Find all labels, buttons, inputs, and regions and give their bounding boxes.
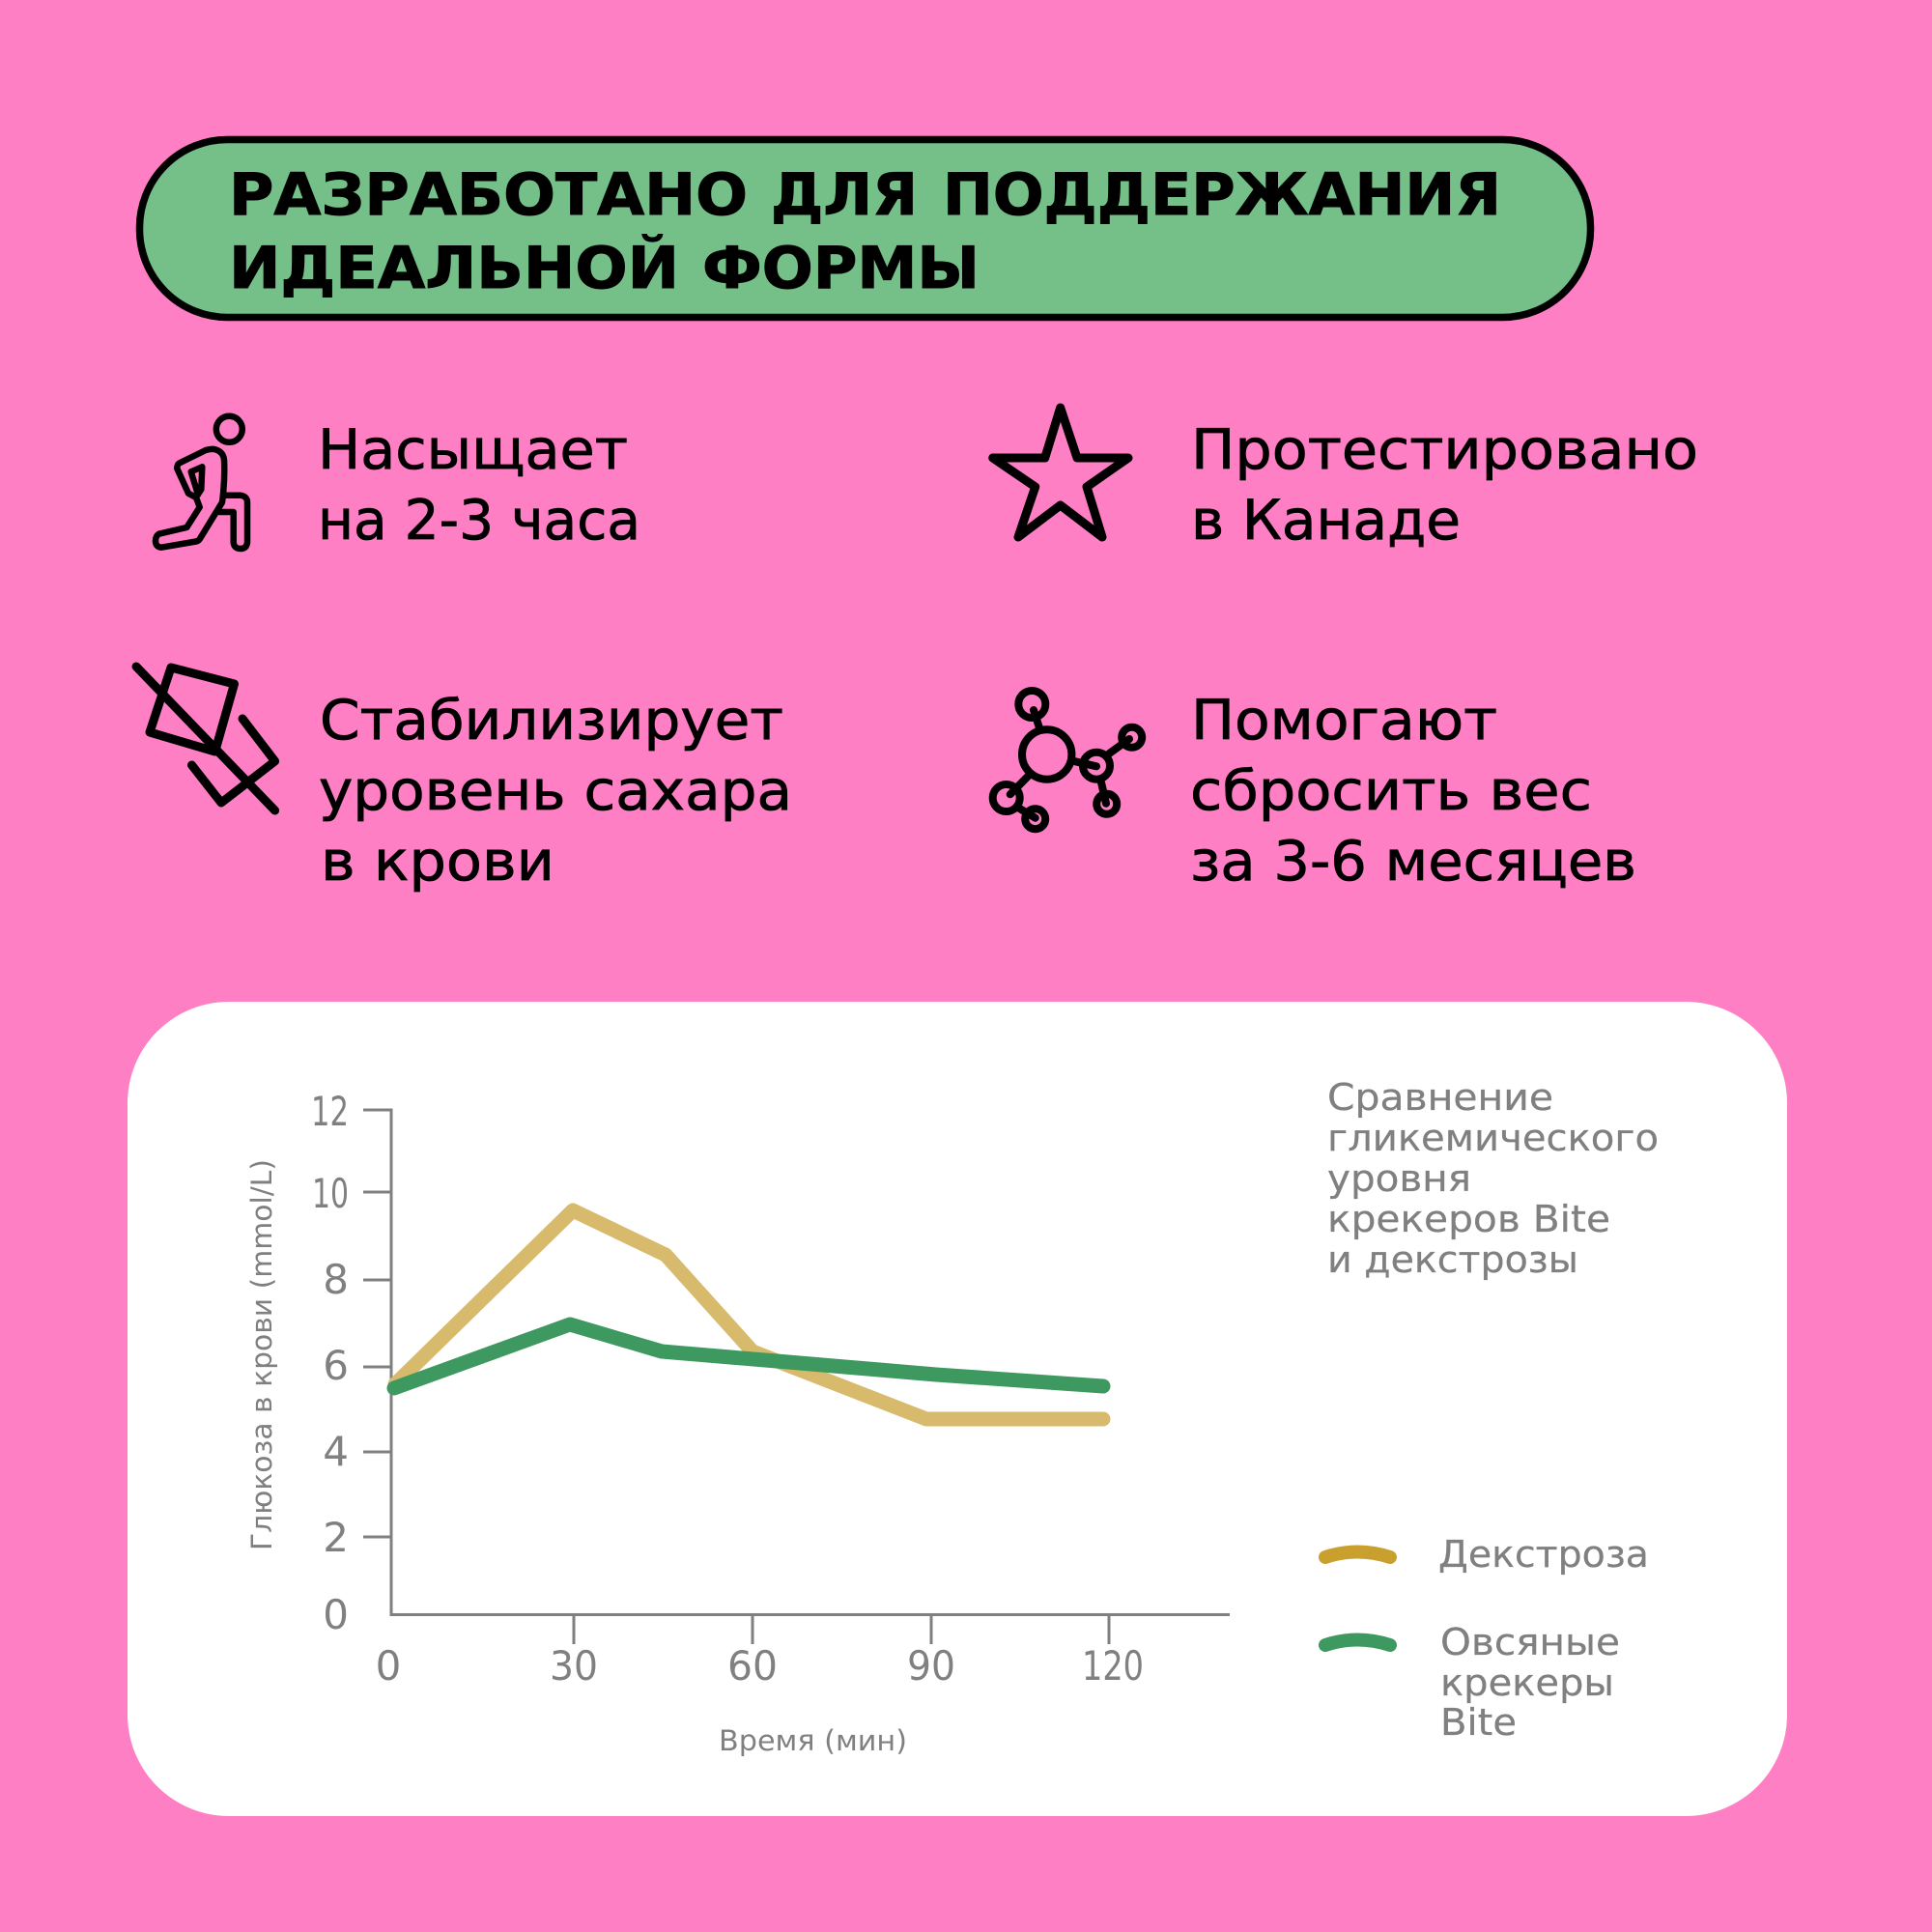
title pill: ДЛЯ <box>771 161 918 229</box>
y-axis numbers: 12 <box>311 1088 349 1135</box>
text: stabilizes sugar: уровень сахара <box>319 759 792 823</box>
text: satiety: на 2-3 часа <box>318 489 640 553</box>
line: dextrose <box>395 1210 1103 1419</box>
chart axes <box>363 1110 1230 1644</box>
x-axis numbers: 90 <box>907 1642 955 1690</box>
text: helps lose weight <box>1190 689 1636 894</box>
chart description: и декстрозы <box>1327 1238 1578 1281</box>
y-axis numbers: 8 <box>323 1256 349 1303</box>
line chart <box>245 1088 1230 1757</box>
legend: dextrose: Декстроза <box>1438 1533 1649 1576</box>
text: stabilizes sugar: в крови <box>321 830 554 894</box>
line: oat crackers <box>394 1324 1103 1388</box>
title pill <box>139 139 1590 317</box>
y-axis numbers: 4 <box>323 1428 349 1475</box>
icon: lunging person <box>156 416 247 549</box>
text: helps lose weight: Помогают <box>1191 689 1497 753</box>
icon: crossed-out cracker <box>136 667 275 810</box>
y-axis numbers <box>311 1088 349 1638</box>
text: satiety: Насыщает <box>318 418 628 482</box>
y-axis numbers: 6 <box>323 1342 349 1389</box>
text: tested <box>1191 418 1698 553</box>
chart description: гликемического <box>1327 1117 1659 1159</box>
icon: star <box>993 408 1128 537</box>
text: stabilizes sugar: Стабилизирует <box>320 689 783 753</box>
x-axis numbers: 60 <box>727 1642 778 1690</box>
legend: oat crackers: Bite <box>1440 1701 1517 1744</box>
chart description: крекеров Bite <box>1327 1198 1610 1240</box>
x-axis numbers: 120 <box>1082 1642 1144 1690</box>
text: helps lose weight: сбросить вес <box>1190 759 1592 823</box>
y-axis numbers: 2 <box>323 1514 349 1561</box>
y-axis numbers: 0 <box>323 1591 349 1638</box>
legend: oat crackers <box>1325 1621 1620 1744</box>
text: stabilizes sugar <box>319 689 792 894</box>
chart description: уровня <box>1327 1157 1471 1200</box>
title pill: ИДЕАЛЬНОЙ <box>229 233 679 302</box>
icon: molecule <box>993 691 1142 829</box>
text: helps lose weight: за 3-6 месяцев <box>1190 830 1636 894</box>
legend: oat crackers: крекеры <box>1440 1662 1614 1704</box>
chart description: Сравнение <box>1327 1076 1553 1119</box>
legend: dextrose <box>1325 1533 1649 1576</box>
text: satiety <box>318 418 640 553</box>
y-axis title: Глюкоза в крови (mmol/L) <box>245 1159 278 1550</box>
x-axis numbers: 30 <box>550 1642 598 1690</box>
legend: oat crackers: Овсяные <box>1440 1621 1620 1663</box>
x-axis numbers <box>376 1642 1144 1690</box>
title pill: ПОДДЕРЖАНИЯ <box>943 161 1501 229</box>
panel: chart card <box>128 1002 1787 1816</box>
text: tested: Протестировано <box>1191 418 1698 482</box>
title pill: ФОРМЫ <box>702 235 980 302</box>
text: tested: в Канаде <box>1191 489 1461 553</box>
title pill: РАЗРАБОТАНО <box>229 161 748 229</box>
chart description <box>1327 1076 1659 1281</box>
x-axis title: Время (мин) <box>719 1724 907 1757</box>
y-axis numbers: 10 <box>312 1170 349 1217</box>
x-axis numbers: 0 <box>376 1642 401 1690</box>
